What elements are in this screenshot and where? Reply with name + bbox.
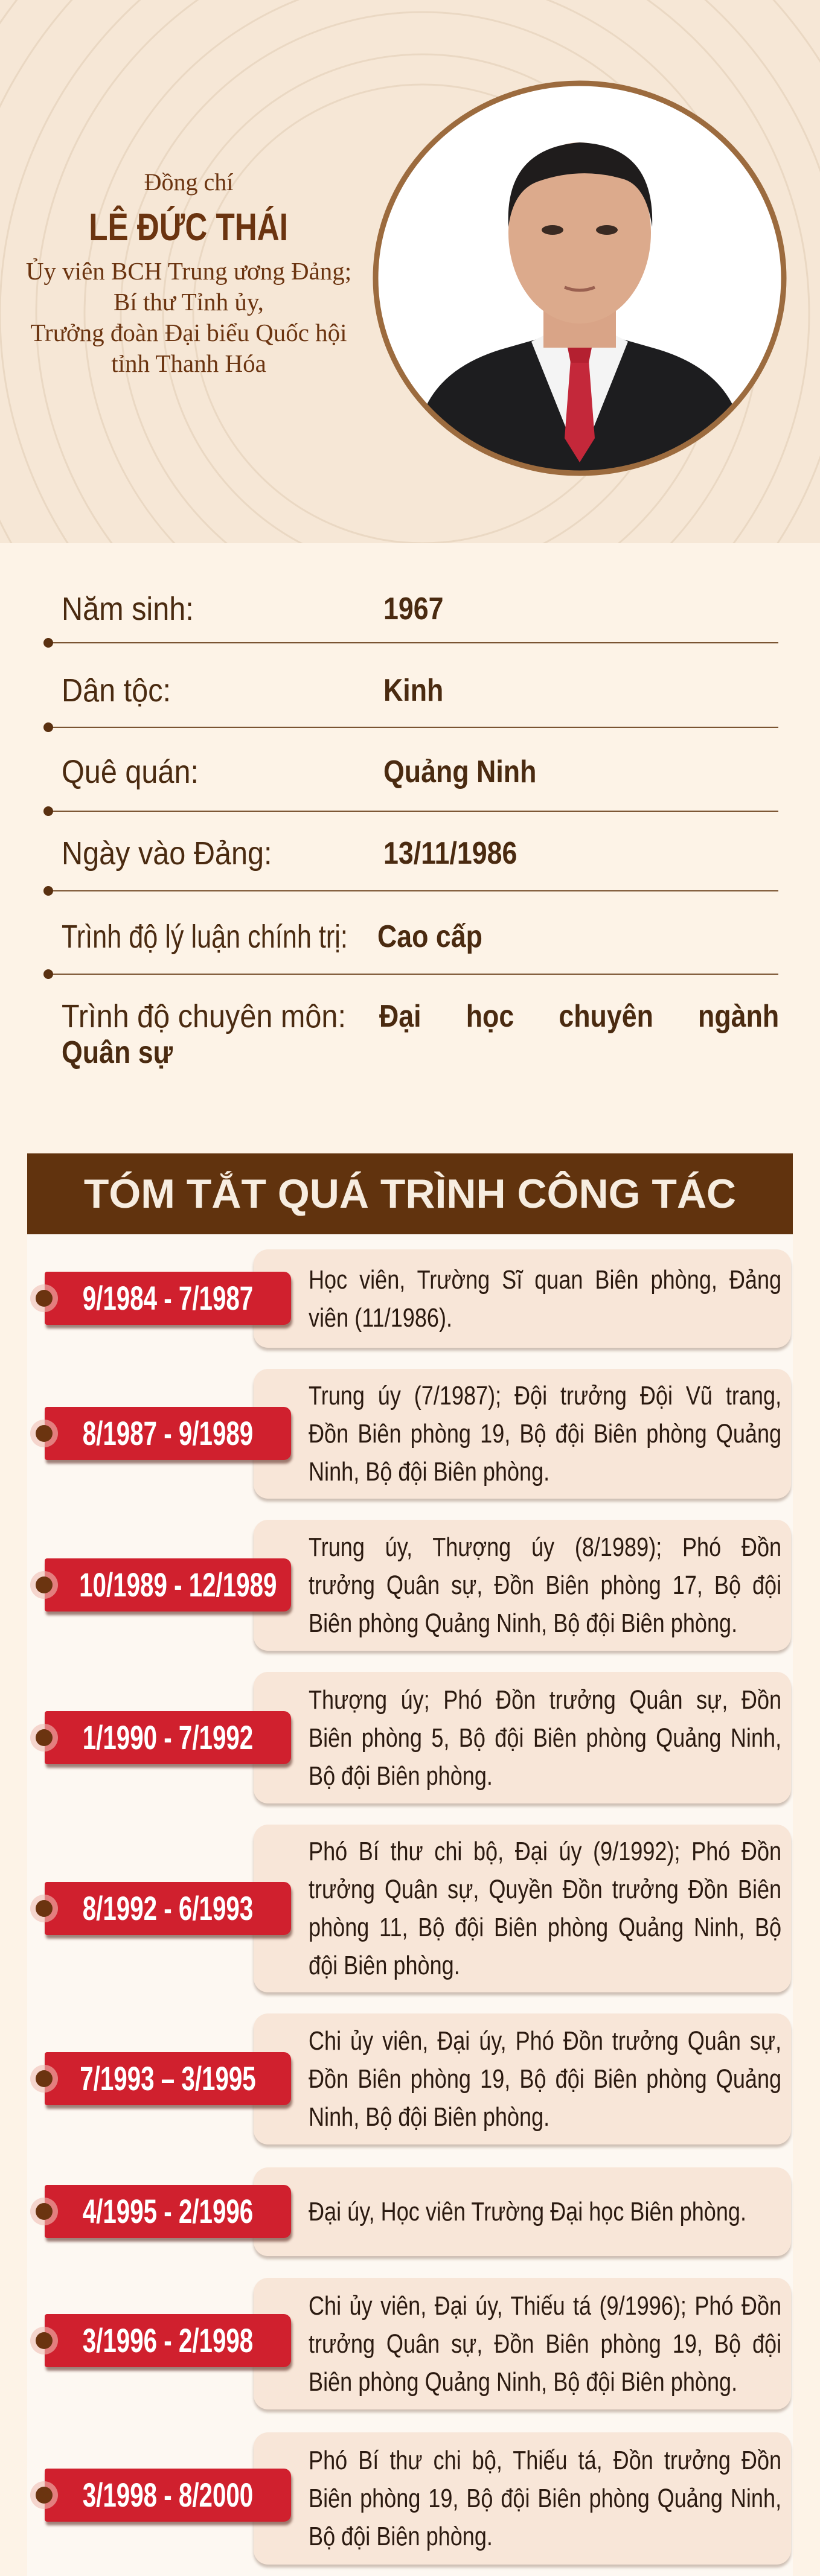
timeline item 2: Đồn Biên phòng 19, Bộ đội Biên phòng Quảng <box>309 1419 781 1449</box>
timeline panel background <box>27 1153 793 2576</box>
timeline item 4: 1/1990 - 7/1992 <box>83 1718 253 1756</box>
timeline item 1: Học viên, Trường Sĩ quan Biên phòng, Đảng <box>309 1265 781 1294</box>
timeline item 3: Biên phòng Quảng Ninh, Bộ đội Biên phòng. <box>309 1608 737 1638</box>
timeline item 2: 8/1987 - 9/1989 <box>83 1414 253 1452</box>
timeline item 8: Chi ủy viên, Đại úy, Thiếu tá (9/1996); Phó Đồn <box>309 2291 781 2320</box>
timeline item 4: Thượng úy; Phó Đồn trưởng Quân sự, Đồn <box>309 1685 781 1714</box>
timeline item 3 <box>30 1520 792 1655</box>
text: positions: Ủy viên BCH Trung ương Đảng; <box>26 257 351 285</box>
timeline item 6: Đồn Biên phòng 19, Bộ đội Biên phòng Quảng <box>309 2064 781 2094</box>
row: professional level: Trình độ chuyên môn: <box>62 998 346 1035</box>
timeline item 9 <box>30 2432 792 2569</box>
text: positions: Bí thư Tỉnh ủy, <box>114 288 264 316</box>
timeline item 9: Phó Bí thư chi bộ, Thiếu tá, Đồn trưởng Đồn <box>309 2446 781 2475</box>
timeline item 5 <box>30 1825 792 1997</box>
timeline item 7: 4/1995 - 2/1996 <box>83 2192 253 2230</box>
row: hometown: Quảng Ninh <box>383 754 536 789</box>
timeline item 3: 10/1989 - 12/1989 <box>79 1566 277 1604</box>
timeline item 7 <box>30 2167 792 2261</box>
row: party entry: Ngày vào Đảng: <box>62 835 272 872</box>
row: birth year: 1967 <box>383 591 443 626</box>
text: positions: Trưởng đoàn Đại biểu Quốc hội <box>30 319 347 346</box>
text: positions <box>26 257 351 377</box>
timeline item 4: Biên phòng 5, Bộ đội Biên phòng Quảng Ninh, <box>309 1723 781 1753</box>
heading: timeline title: TÓM TẮT QUÁ TRÌNH CÔNG TÁC <box>84 1171 736 1217</box>
timeline item 9: Biên phòng 19, Bộ đội Biên phòng Quảng Ninh, <box>309 2484 781 2513</box>
row: professional level: Quân sự <box>62 1035 173 1070</box>
row: ethnicity: Dân tộc: <box>62 672 171 709</box>
timeline item 1: 9/1984 - 7/1987 <box>83 1279 253 1317</box>
timeline item 8: Biên phòng Quảng Ninh, Bộ đội Biên phòng. <box>309 2367 737 2396</box>
row: hometown: Quê quán: <box>62 754 199 790</box>
timeline item 9: 3/1998 - 8/2000 <box>83 2476 253 2514</box>
timeline item 9: Bộ đội Biên phòng. <box>309 2522 493 2551</box>
row: professional level: Đại học chuyên ngành <box>379 999 779 1034</box>
row: political theory: Trình độ lý luận chính trị: <box>62 919 348 955</box>
timeline item 1 <box>30 1249 792 1352</box>
row: political theory <box>43 919 778 979</box>
row: birth year <box>43 591 778 648</box>
timeline item 6: 7/1993 – 3/1995 <box>80 2059 256 2097</box>
row: hometown <box>43 754 778 816</box>
timeline item 5: đội Biên phòng. <box>309 1951 460 1980</box>
portrait photo <box>373 81 786 476</box>
row: ethnicity <box>43 672 778 732</box>
timeline item 5: trưởng Quân sự, Quyền Đồn trưởng Đồn Biên <box>309 1875 781 1904</box>
timeline item 6: Ninh, Bộ đội Biên phòng. <box>309 2102 549 2132</box>
timeline item 3: trưởng Quân sự, Đồn Biên phòng 17, Bộ đội <box>309 1570 781 1600</box>
timeline item 8 <box>30 2278 792 2414</box>
timeline item 2: Trung úy (7/1987); Đội trưởng Đội Vũ trang, <box>309 1381 781 1411</box>
row: professional level <box>62 998 779 1070</box>
timeline item 5: phòng 11, Bộ đội Biên phòng Quảng Ninh, Bộ <box>309 1913 781 1942</box>
heading: name: LÊ ĐỨC THÁI <box>89 205 288 249</box>
decorative drum pattern <box>0 0 820 543</box>
timeline item 8: trưởng Quân sự, Đồn Biên phòng 19, Bộ đội <box>309 2329 781 2359</box>
row: party entry <box>43 835 778 896</box>
timeline item 5: 8/1992 - 6/1993 <box>83 1889 253 1927</box>
timeline item 7: Đại úy, Học viên Trường Đại học Biên phòng. <box>309 2197 746 2227</box>
row: ethnicity: Kinh <box>383 673 443 708</box>
timeline item 1: viên (11/1986). <box>309 1302 452 1333</box>
timeline item 6: Chi ủy viên, Đại úy, Phó Đồn trưởng Quân sự, <box>309 2026 781 2056</box>
timeline item 6 <box>30 2013 792 2149</box>
timeline item 2: Ninh, Bộ đội Biên phòng. <box>309 1457 549 1487</box>
header: portrait section <box>0 0 820 543</box>
heading: timeline title <box>27 1153 793 1234</box>
info panel: personal details <box>43 591 779 1070</box>
timeline item 8: 3/1996 - 2/1998 <box>83 2321 253 2359</box>
timeline item 5: Phó Bí thư chi bộ, Đại úy (9/1992); Phó Đồn <box>309 1837 781 1866</box>
row: political theory: Cao cấp <box>377 919 482 954</box>
row: birth year: Năm sinh: <box>62 591 194 627</box>
text: positions: tỉnh Thanh Hóa <box>111 349 266 377</box>
timeline item 4 <box>30 1672 792 1808</box>
timeline item 2 <box>30 1369 792 1503</box>
timeline item 3: Trung úy, Thượng úy (8/1989); Phó Đồn <box>309 1532 781 1562</box>
text: title: Đồng chí <box>144 168 233 196</box>
row: party entry: 13/11/1986 <box>383 836 517 871</box>
timeline item 4: Bộ đội Biên phòng. <box>309 1761 493 1790</box>
